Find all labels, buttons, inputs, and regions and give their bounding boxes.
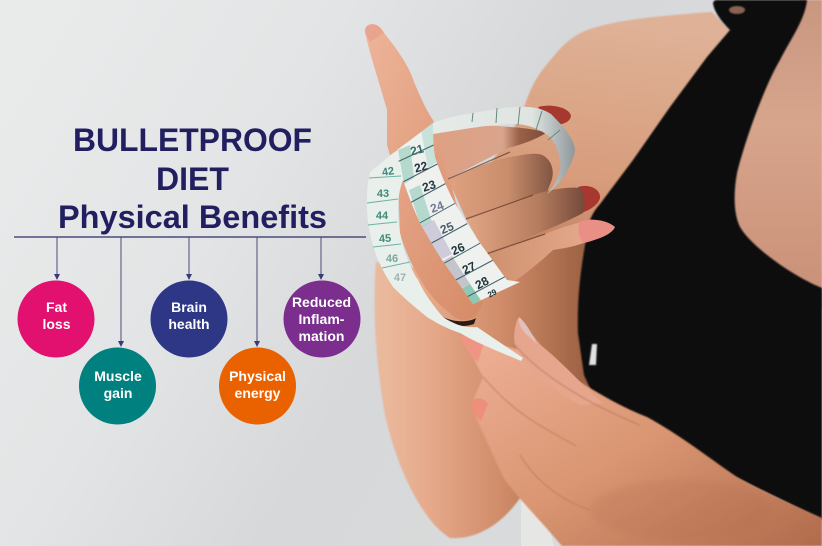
tape tint bands	[398, 145, 432, 228]
benefit: reduced inflammation: Reduced	[292, 294, 351, 310]
tape numbers 21 to 29: 24	[428, 198, 446, 216]
photo: woman with measuring tape	[365, 0, 822, 546]
arrow to muscle gain	[118, 237, 124, 347]
benefit: muscle gain: gain	[104, 385, 132, 401]
tape numbers 21 to 29: 26	[449, 240, 467, 258]
title line: Diet: DIET	[156, 161, 229, 197]
benefit: reduced inflammation	[284, 280, 360, 358]
middle finger	[448, 154, 553, 219]
ring finger	[466, 188, 585, 254]
tape tick lines	[395, 143, 510, 298]
tape tail	[521, 498, 554, 546]
tape numbers 42 to 47: 46	[386, 253, 398, 265]
tape numbers 21 to 29: 22	[413, 158, 430, 175]
arrow to physical energy	[254, 237, 260, 347]
benefit: brain health: Brain	[171, 299, 207, 315]
tape back strand	[367, 150, 523, 361]
tape front strip	[397, 123, 520, 304]
dark shadow under palm	[443, 317, 476, 326]
back of hand	[463, 336, 822, 546]
arrow to brain health	[186, 237, 192, 280]
skin spot by the strap	[729, 6, 745, 14]
title line: Bulletproof: BULLETPROOF	[73, 122, 312, 158]
ring fingernail	[578, 186, 600, 214]
tape numbers 42 to 47: 45	[378, 232, 392, 246]
tape numbers 42 to 47: 47	[394, 272, 406, 284]
thumbnail	[365, 24, 384, 42]
pinky finger	[486, 222, 590, 286]
arrow to reduced inflammation	[318, 237, 324, 280]
benefit: muscle gain	[79, 348, 156, 424]
tape top loop ticks	[472, 107, 560, 140]
tape numbers 42 to 47: 43	[377, 188, 389, 200]
lower hand	[460, 317, 822, 546]
finger creases	[483, 345, 640, 510]
tape numbers 21 to 29: 25	[438, 219, 456, 237]
title	[58, 122, 327, 235]
arrow to fat loss	[54, 237, 60, 280]
measuring tape	[367, 107, 575, 361]
tape back strand ticks	[367, 176, 410, 268]
tape numbers 21 to 29: 21	[409, 141, 426, 158]
chest skin	[720, 0, 822, 310]
upper arm	[374, 240, 600, 538]
benefit: brain health	[150, 280, 228, 358]
tape numbers 21 to 29: 28	[473, 274, 491, 292]
benefit: physical energy: Physical	[229, 368, 286, 384]
benefit: physical energy: energy	[235, 385, 281, 401]
benefit: reduced inflammation: mation	[299, 328, 344, 344]
tape numbers 42 to 47: 44	[376, 210, 389, 222]
black top	[578, 0, 822, 520]
benefit: brain health: health	[168, 316, 210, 332]
benefit: fat loss	[18, 280, 94, 358]
pinky fingernail	[578, 220, 615, 243]
thumb and palm	[365, 25, 483, 320]
finger gaps	[448, 152, 545, 254]
tape numbers 21 to 29: 29	[486, 287, 499, 300]
tape numbers 21 to 29: 23	[420, 177, 438, 195]
tape numbers 42 to 47: 42	[381, 165, 395, 179]
tape tint and ticks	[398, 123, 505, 304]
benefit: physical energy	[219, 348, 296, 424]
title line: Physical Benefits: Physical Benefits	[58, 199, 327, 235]
benefit: fat loss: Fat	[46, 299, 67, 315]
white fabric accent	[589, 344, 597, 365]
index fingernail	[538, 106, 571, 125]
top fingernail	[519, 317, 537, 344]
benefit: fat loss: loss	[42, 316, 71, 332]
wrist shading	[590, 480, 770, 540]
tape numbers 21 to 29	[409, 141, 499, 300]
tape numbers 21 to 29: 27	[460, 259, 478, 277]
connector line with arrows	[14, 237, 366, 347]
benefit: reduced inflammation: Inflam-	[299, 311, 345, 327]
top finger	[514, 318, 603, 405]
fingertip nails	[460, 335, 484, 362]
shoulder skin	[470, 12, 740, 360]
index finger	[434, 126, 546, 179]
tape top loop	[433, 107, 575, 194]
tape numbers 42 to 47	[376, 165, 406, 284]
benefit: muscle gain: Muscle	[94, 368, 142, 384]
